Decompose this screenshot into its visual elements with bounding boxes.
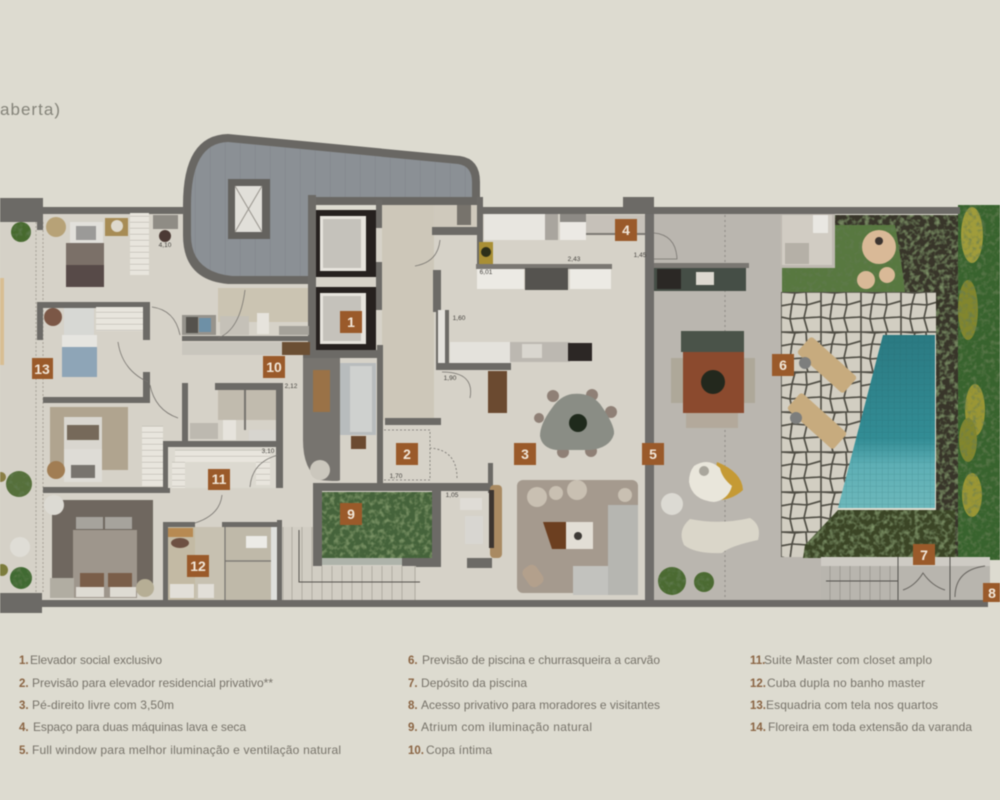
legend column 1 bbox=[19, 653, 341, 757]
marker 11 bbox=[208, 469, 230, 490]
roof slab with skylight bbox=[183, 134, 480, 284]
kidney table bbox=[689, 462, 743, 502]
legend column 2: 9. bbox=[408, 722, 418, 734]
marker 7: 7 bbox=[920, 547, 928, 563]
legend column 1: Pé-direito livre com 3,50m bbox=[32, 698, 174, 712]
legend column 3: Esquadria com tela nos quartos bbox=[766, 698, 938, 712]
marker 10: 10 bbox=[266, 359, 282, 375]
legend column 2: 10. bbox=[408, 745, 424, 757]
legend column 2: 8. bbox=[408, 700, 418, 712]
legend column 2: Acesso privativo para moradores e visitantes bbox=[421, 698, 660, 712]
kitchen counter bbox=[476, 264, 612, 290]
bedroom one bbox=[46, 213, 178, 287]
dimension labels: 2,12 bbox=[285, 383, 298, 390]
marker 6: 6 bbox=[779, 357, 787, 373]
storage and private access bbox=[821, 557, 1000, 600]
kitchen island bbox=[438, 310, 592, 413]
dimension labels: 6,01 bbox=[480, 269, 493, 276]
marker 12 bbox=[187, 555, 209, 577]
dimension labels: 1,60 bbox=[453, 315, 466, 322]
legend column 3: Suite Master com closet amplo bbox=[764, 653, 932, 667]
icon: skylight bbox=[228, 179, 270, 239]
dining table on terrace bbox=[671, 331, 755, 428]
legend column 2 bbox=[408, 653, 660, 757]
legend column 1: 3. bbox=[19, 700, 29, 712]
bedroom two bbox=[44, 307, 143, 377]
elevator shafts bbox=[316, 210, 376, 350]
legend column 3: 11. bbox=[750, 655, 765, 667]
copa counter bbox=[182, 313, 310, 355]
dimension labels bbox=[159, 242, 647, 499]
dimension labels: 1,45 bbox=[634, 252, 647, 259]
legend column 3: 14. bbox=[750, 722, 766, 734]
dark hedge bbox=[835, 215, 958, 558]
legend column 1: Full window para melhor iluminação e ventilação natural bbox=[32, 743, 341, 757]
green wall bbox=[958, 205, 1000, 560]
swimming pool bbox=[838, 335, 935, 508]
garden table and stools bbox=[857, 230, 896, 289]
legend column 3: 12. bbox=[750, 678, 766, 690]
bedroom three bbox=[47, 407, 163, 486]
legend column 1: Previsão para elevador residencial privativo** bbox=[32, 676, 273, 690]
heading fragment: aberta) bbox=[0, 100, 60, 119]
marker 12: 12 bbox=[190, 558, 206, 574]
garden lawn bbox=[782, 215, 912, 293]
terrace bathroom bbox=[780, 214, 835, 268]
marker 3: 3 bbox=[521, 446, 529, 462]
legend column 1: 5. bbox=[19, 745, 29, 757]
barbecue counter bbox=[654, 263, 749, 291]
legend column 1: 1. bbox=[19, 655, 29, 667]
door arcs bbox=[118, 233, 677, 523]
dimension labels: 1,70 bbox=[390, 473, 403, 480]
marker 5: 5 bbox=[649, 446, 657, 462]
marker 6 bbox=[772, 354, 794, 376]
marker 10 bbox=[263, 356, 285, 378]
guest bathroom bbox=[460, 485, 502, 558]
triangular dining table bbox=[534, 389, 617, 458]
marker 13: 13 bbox=[34, 361, 50, 377]
glass strip bbox=[322, 558, 402, 565]
marker 8: 8 bbox=[988, 585, 996, 601]
marker 2: 2 bbox=[403, 446, 411, 462]
legend column 2: Previsão de piscina e churrasqueira a carvão bbox=[422, 653, 660, 667]
legend column 3 bbox=[750, 653, 972, 734]
marker 4: 4 bbox=[622, 222, 630, 238]
legend column 3: Floreira em toda extensão da varanda bbox=[768, 720, 972, 734]
dimension labels: 2,43 bbox=[568, 256, 581, 263]
marker 8 bbox=[983, 583, 1000, 602]
numbered markers bbox=[32, 219, 1000, 602]
legend column 2: 6. bbox=[408, 655, 418, 667]
terrace floor bbox=[654, 214, 821, 600]
marker 5 bbox=[642, 443, 664, 465]
master bedroom bbox=[50, 500, 154, 598]
legend column 2: Depósito da piscina bbox=[421, 676, 527, 690]
marker 1: 1 bbox=[347, 314, 355, 330]
legend column 2: Atrium com iluminação natural bbox=[421, 720, 592, 734]
legend column 2: Copa íntima bbox=[426, 743, 492, 757]
stool and sofa bbox=[661, 493, 759, 553]
legend column 1: 4. bbox=[19, 722, 29, 734]
marker 7 bbox=[913, 544, 935, 565]
marker 11: 11 bbox=[212, 471, 227, 487]
marker 9: 9 bbox=[347, 506, 355, 522]
dimension labels: 3,10 bbox=[262, 448, 275, 455]
marker 3 bbox=[514, 443, 536, 465]
laundry area bbox=[479, 214, 645, 264]
marker 2 bbox=[396, 443, 418, 465]
legend column 3: Cuba dupla no banho master bbox=[767, 676, 925, 690]
legend bbox=[19, 653, 972, 757]
stone paving bbox=[781, 292, 938, 557]
dimension labels: 4,10 bbox=[159, 242, 172, 249]
atrium garden bbox=[322, 492, 432, 558]
legend column 1: 2. bbox=[19, 678, 29, 690]
legend column 1: Elevador social exclusivo bbox=[30, 653, 162, 667]
interior floor bbox=[0, 205, 650, 602]
balcony plants bbox=[0, 222, 64, 589]
marker 9 bbox=[340, 503, 362, 525]
master closet bbox=[168, 447, 276, 488]
marker 4 bbox=[615, 219, 637, 241]
dimension labels: 1,90 bbox=[444, 375, 457, 382]
bottom hedge bbox=[803, 510, 955, 558]
structural walls bbox=[0, 195, 988, 613]
legend column 1: Espaço para duas máquinas lava e seca bbox=[33, 720, 246, 734]
staircase bbox=[283, 527, 420, 600]
terrace plants bbox=[658, 567, 714, 595]
marker 13 bbox=[32, 358, 53, 379]
legend column 3: 13. bbox=[750, 700, 766, 712]
marker 1 bbox=[340, 311, 362, 333]
master bath bbox=[168, 527, 277, 600]
suite bathroom bbox=[190, 390, 276, 441]
legend column 2: 7. bbox=[408, 678, 418, 690]
living room set bbox=[517, 480, 638, 595]
sun loungers bbox=[787, 336, 857, 450]
dimension labels: 1,05 bbox=[446, 492, 459, 499]
lounge nook bbox=[303, 358, 376, 481]
floor plan bbox=[0, 134, 1000, 613]
